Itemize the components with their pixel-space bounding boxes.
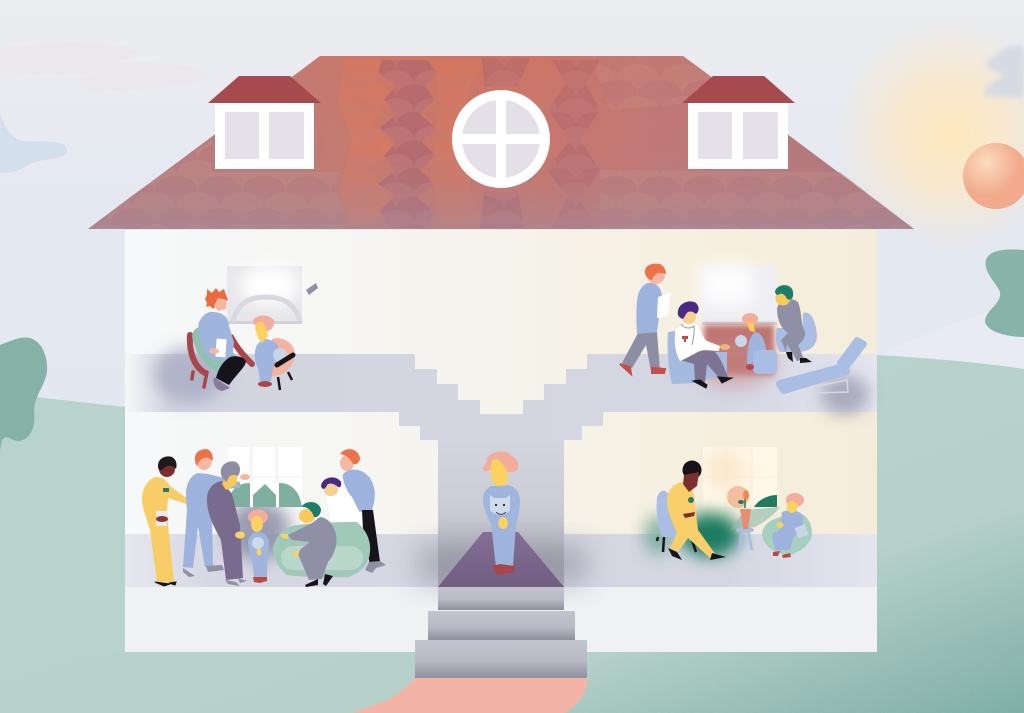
caregiver face [214,298,227,311]
roof tiles: dark band under window [480,192,524,228]
vase [740,509,751,529]
older woman hand [235,532,245,538]
chair band [277,355,293,365]
staff shoes [668,548,726,560]
yellow staff badge [163,488,169,492]
child hair [786,493,804,507]
dormer roof [682,76,795,103]
tall nurse face [340,455,354,471]
dormer pane left [698,112,732,159]
path [352,678,587,713]
child body [772,510,803,550]
doctor hair [678,301,699,319]
roof tiles: orange band right [430,60,484,228]
hair [483,451,518,472]
round window [452,90,550,188]
older woman body [207,481,243,580]
sun glow [835,20,1024,250]
house [125,230,877,652]
red glow soft [693,336,777,388]
tall nurse hair [340,449,360,464]
tall nurse body [343,469,375,512]
green glow left [644,515,672,555]
child hair [742,313,758,325]
doctor body [327,488,363,534]
doctor shoes [693,377,732,388]
nurse body and legs [183,473,240,568]
shadow behind child [226,500,290,560]
yellow staff shoes [155,582,176,586]
caregiver hand [209,348,219,354]
small wall object [306,283,318,295]
sofa [273,522,370,577]
column gradient [438,440,564,587]
step 2 [428,611,575,640]
stairs [415,587,587,678]
child hair [253,316,274,331]
parent head [299,509,315,523]
doctor hand [720,344,730,350]
scene: lower right room, calm talk [644,447,812,560]
carpet [438,532,564,587]
older woman face [222,475,238,490]
sky stipple above right hill [880,300,1024,369]
cloud: left blue [0,115,67,173]
cloud: right grey [984,45,1024,98]
child seat [753,350,777,374]
toy cat [735,335,747,347]
window [228,447,302,507]
doctor body [675,323,720,361]
house walls [125,230,877,652]
treatment chair legs [813,380,848,403]
parent hair [301,502,321,517]
tree: left [0,337,47,450]
nurse head [647,266,665,284]
yellow staff hand [193,499,205,505]
dormer pane right [743,112,778,159]
child face [786,501,798,513]
dormer roof [208,76,321,103]
child toy print [252,537,264,549]
ground floor strip [125,534,877,587]
child shoe [258,381,272,387]
caregiver body [198,312,234,361]
parent shoes [305,574,333,587]
nurse hand [240,474,250,480]
nurse paper [657,293,670,318]
scene: lower left room, group around child [142,447,386,587]
roof base [88,56,914,229]
window cross [457,95,545,183]
yellow staff head [159,461,175,477]
central child on carpet [483,451,520,575]
shadow left upper floor [154,347,226,403]
nurse shoes [620,364,665,374]
child face [251,516,263,532]
child face [255,322,268,343]
step 1 [438,587,564,610]
child toy [795,524,809,538]
parent chair [776,313,817,352]
nurse shoes [183,565,224,577]
nurse body [636,283,662,334]
sun [963,143,1024,209]
dormer right [682,76,795,169]
step 3 [415,640,587,678]
window [227,265,302,324]
body [483,485,520,567]
roof tiles: orange band [338,60,396,228]
roof tiles: light top [590,56,730,110]
dormer frame [215,103,314,169]
nurse hair [195,449,213,466]
chair seat green [192,327,240,374]
window frame [452,90,550,188]
doctor cross [682,336,688,342]
parent hair [775,285,793,300]
parent body and legs [777,299,805,361]
dormer frame [688,103,788,169]
child body [248,532,269,577]
sofa cushion [281,546,363,570]
parent head [776,290,790,306]
paper [215,339,227,357]
dormer pane left [225,112,259,159]
tall nurse shoes [365,561,386,573]
ground grain [560,655,1024,713]
dormer left [208,76,321,169]
window [703,447,777,507]
face [490,459,508,488]
hill: left [0,396,125,713]
child shoe [746,364,754,370]
nurse hair [645,264,666,280]
doctor trousers [680,350,728,382]
nurse legs [622,332,660,371]
chair back [657,491,677,537]
caregiver shoes [213,377,230,391]
older woman hair [221,461,240,482]
peach circle [727,486,749,508]
staff hand [683,512,695,518]
tall nurse trousers [362,510,380,565]
yellow staff hair [158,456,177,470]
caregiver trousers [216,356,246,385]
window [702,265,777,325]
green arches [228,483,302,507]
child hand [256,548,262,556]
older woman shoes [225,578,247,586]
green quarter behind table [730,507,780,530]
parent hands [280,534,300,556]
staff hair [682,460,702,480]
stair structure: upper floor and Y staircase [125,354,877,534]
dormer pane right [269,112,304,159]
cloud: top left pink [0,43,205,90]
staff face [683,472,699,492]
doctor hair [321,477,341,489]
parent shoes [786,352,812,363]
flower [738,490,749,508]
basement band [125,587,877,652]
child hand [776,522,784,528]
parent body [288,517,337,580]
child shoes [773,551,791,558]
child body [747,332,766,366]
staff body [667,482,716,558]
hand [498,517,508,529]
child chair [268,338,295,376]
stethoscope [681,324,694,345]
child hair [248,510,268,524]
green arc [754,495,777,507]
nurse head [196,450,212,470]
chair red [190,335,252,387]
roof [88,56,914,229]
window glass [462,100,540,178]
child body [255,339,279,381]
treatment chair seat [780,367,846,390]
toy bear [273,348,287,362]
doctor head [682,310,696,324]
roof tiles: dark band centre right [482,58,530,86]
roof tiles: dark band right [546,60,600,228]
scene: upper left room, caregiver with child [190,265,318,391]
caregiver hair [205,288,228,309]
chair legs [657,537,696,552]
clipboard [156,511,168,526]
cat toy [490,495,510,514]
roof tiles: light lower left [88,140,340,229]
roof tiles: light lower right [600,170,914,229]
doctor chair [668,331,727,384]
roof tiles: dark band left [378,60,436,228]
red wall glow [704,325,774,375]
floor shadow by column [418,545,586,583]
roof shading [88,56,914,229]
green glow blob [680,513,740,557]
staff badge [688,497,694,503]
child chair [762,514,812,555]
tree: right [985,249,1024,337]
treatment chair shadow [821,375,869,415]
child chair legs [278,372,292,390]
table [736,527,754,550]
scene: upper right room, medical visit [620,264,869,415]
child shoes [253,577,267,583]
yellow staff body [142,477,192,582]
doctor face [324,484,338,496]
hill: right and ground [0,355,1024,713]
treatment chair back [840,340,864,366]
shoes [492,564,515,575]
child face [746,322,755,332]
